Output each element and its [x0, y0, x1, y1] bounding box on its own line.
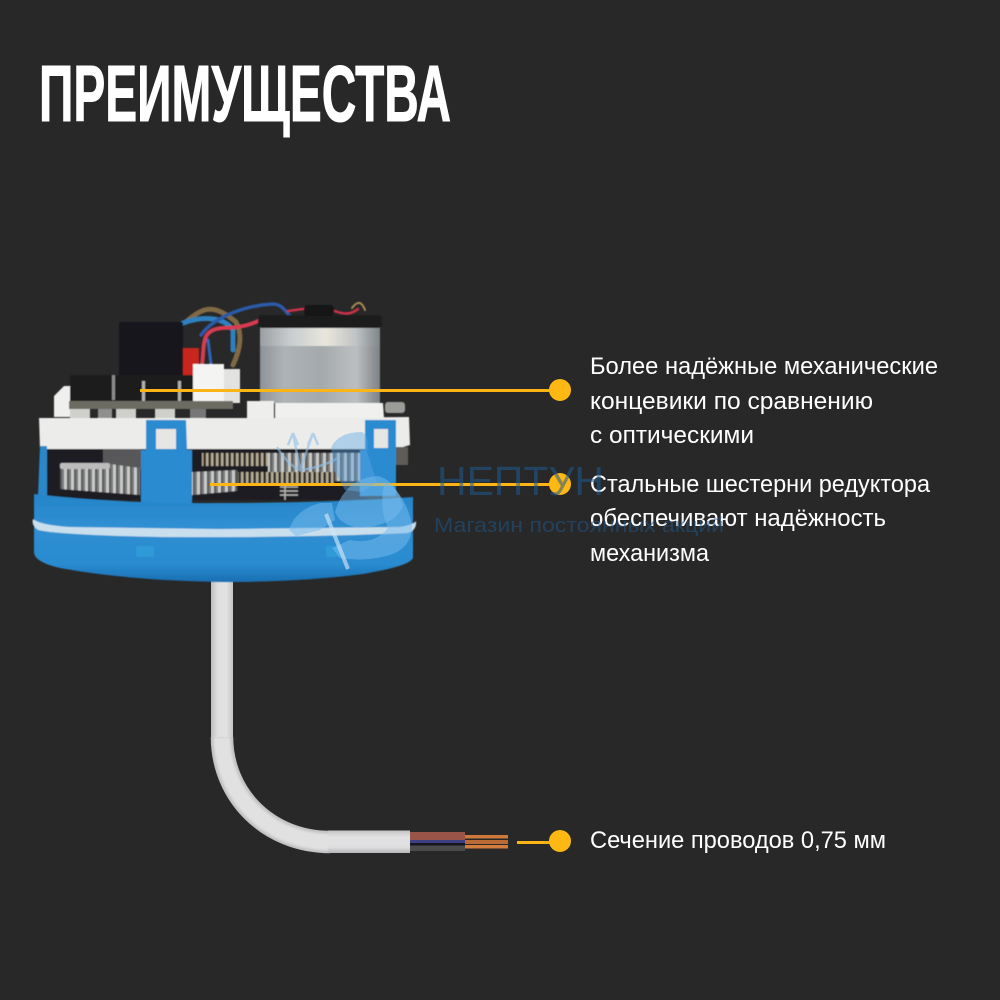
head and hair [331, 432, 377, 492]
watermark: brand name: НЕПТУН [437, 458, 604, 504]
translucent band [33, 519, 416, 537]
callout text: концевики по сравнению [590, 388, 873, 415]
left blue strut [38, 446, 47, 496]
callout text: с оптическими [590, 422, 754, 449]
inner insulated wires [410, 832, 465, 851]
white connector [193, 364, 240, 403]
copper strands [465, 835, 508, 848]
leader line [517, 841, 552, 844]
callout text: механизма [590, 540, 710, 567]
leader line [210, 483, 552, 486]
large left gear [60, 463, 140, 495]
gear spring [280, 484, 298, 500]
gear cavity shadow [47, 448, 367, 500]
watermark: Neptune figure [277, 432, 412, 569]
upper gears [202, 453, 360, 484]
black cylinder component [119, 322, 183, 376]
cable bend [222, 737, 330, 842]
callout text: Более надёжные механические [590, 353, 938, 380]
callout: steel gears [210, 471, 931, 567]
white mounting plate [39, 417, 410, 449]
motor body [258, 305, 382, 403]
board standoffs [70, 409, 206, 418]
callout text: обеспечивают надёжность [590, 505, 886, 532]
callout text: Сечение проводов 0,75 мм [590, 827, 886, 854]
marker dot [549, 379, 571, 401]
blue base [34, 494, 413, 582]
screw [385, 402, 405, 413]
dark gear housing [103, 449, 141, 469]
base tabs [136, 546, 340, 557]
cable vertical run [211, 578, 233, 738]
cable horizontal run [328, 830, 410, 853]
front blue clip [141, 420, 192, 504]
title: ПРЕИМУЩЕСТВА [39, 49, 451, 138]
motor mount ring [275, 403, 384, 418]
cable [211, 578, 508, 853]
device photo [33, 303, 416, 582]
left arm [289, 503, 335, 536]
trident [277, 433, 338, 470]
torso [335, 476, 403, 528]
right metal tab [396, 447, 408, 465]
circuit board [69, 401, 233, 409]
red terminal block [183, 348, 199, 377]
callout text [590, 353, 938, 449]
white peg [247, 401, 274, 419]
callout: limit switches [140, 353, 938, 449]
callout: wire cross-section [517, 827, 886, 854]
marker dot [549, 473, 571, 495]
marker dot [549, 830, 571, 852]
watermark: tagline: Магазин постоянных акций [434, 515, 724, 537]
wires [183, 303, 365, 365]
right blue clip [360, 420, 396, 496]
limit switch block [70, 375, 193, 402]
callout text: Стальные шестерни редуктора [590, 471, 931, 498]
callout text [590, 471, 931, 567]
right arm [332, 482, 412, 559]
leader line [140, 389, 552, 392]
cable bend highlight [222, 737, 330, 842]
left white standoff [54, 386, 70, 417]
trident staff [326, 514, 348, 569]
middle gear [192, 470, 237, 495]
